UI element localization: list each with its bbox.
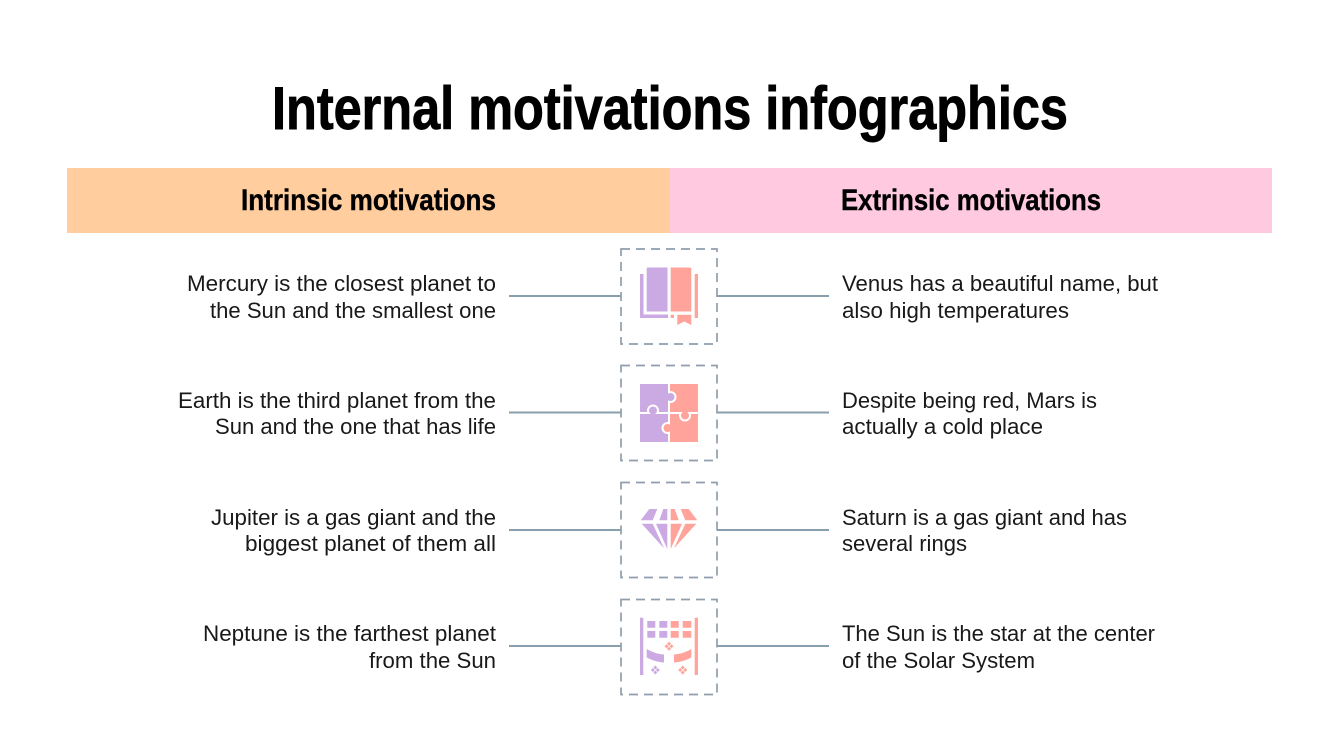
- heading: intrinsic motivations: Intrinsic motivations: [241, 184, 496, 217]
- panel: extrinsic header: [670, 168, 1272, 233]
- icon: diamond: [641, 509, 697, 549]
- text: Earth: Earth is the third planet from the: [178, 388, 496, 413]
- heading: extrinsic motivations: Extrinsic motivations: [841, 184, 1101, 217]
- text: Mars: actually a cold place: [842, 414, 1043, 439]
- text: Venus: [842, 271, 1158, 323]
- text: Jupiter: Jupiter is a gas giant and the: [211, 505, 496, 530]
- icon: book: [640, 268, 698, 325]
- text: Neptune: [203, 621, 496, 673]
- text: Sun: of the Solar System: [842, 648, 1035, 673]
- text: Venus: also high temperatures: [842, 298, 1069, 323]
- text: Earth: Sun and the one that has life: [215, 414, 496, 439]
- text: Mercury: Mercury is the closest planet to: [187, 271, 496, 296]
- text: Saturn: several rings: [842, 531, 967, 556]
- text: Mars: [842, 388, 1097, 439]
- text: Sun: [842, 621, 1155, 673]
- text: Mercury: [187, 271, 496, 323]
- title: Internal motivations infographics: [272, 75, 1068, 142]
- text: Neptune: Neptune is the farthest planet: [203, 621, 496, 646]
- text: Saturn: [842, 505, 1127, 556]
- text: Earth: [178, 388, 496, 439]
- text: Mars: Despite being red, Mars is: [842, 388, 1097, 413]
- icon: calendar: [640, 618, 698, 675]
- text: Venus: Venus has a beautiful name, but: [842, 271, 1158, 296]
- text: Sun: The Sun is the star at the center: [842, 621, 1155, 646]
- panel: intrinsic header: [67, 168, 670, 233]
- text: Mercury: the Sun and the smallest one: [210, 298, 496, 323]
- text: Jupiter: [211, 505, 496, 556]
- text: Jupiter: biggest planet of them all: [245, 531, 496, 556]
- text: Saturn: Saturn is a gas giant and has: [842, 505, 1127, 530]
- icon: puzzle: [640, 384, 698, 442]
- text: Neptune: from the Sun: [369, 648, 496, 673]
